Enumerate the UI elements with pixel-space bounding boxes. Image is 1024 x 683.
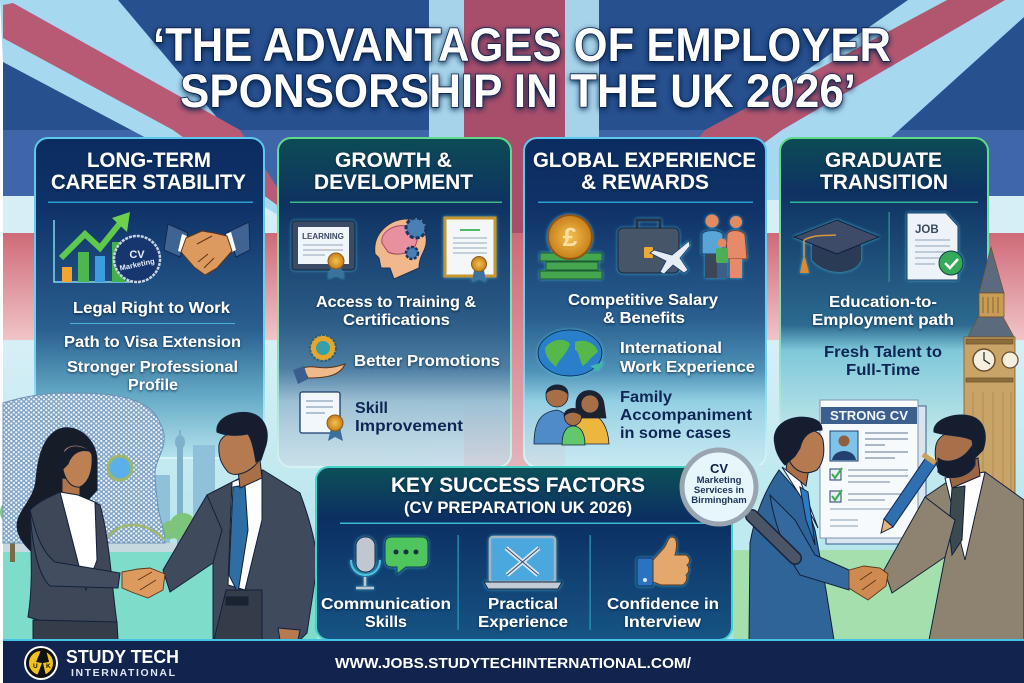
text: fresh talent to full-time [824, 344, 942, 379]
logo: study tech: K [46, 663, 51, 670]
panel heading: graduate transition: GRADUATE [825, 149, 942, 172]
panel heading: growth and development: DEVELOPMENT [314, 171, 473, 194]
text: fresh talent to full-time: Fresh Talent to [824, 344, 942, 361]
icon: growth chart with CV marketing stamp: Marketing [119, 256, 156, 273]
icon: speech bubble [385, 537, 428, 574]
text: access to training and certifications: Access to Training & [316, 294, 476, 311]
logo: study tech: U [33, 663, 38, 670]
panel heading: key success factors: (CV PREPARATION UK 2026) [404, 498, 632, 517]
icon: learning certificate [292, 221, 355, 279]
text: fresh talent to full-time: Full-Time [846, 362, 920, 379]
icon: magnifying glass: Birmingham [691, 495, 747, 506]
icon: globe [538, 330, 604, 376]
panel heading: growth and development: GROWTH & [335, 149, 452, 172]
text: stronger professional profile: Profile [128, 377, 178, 394]
icon: job document with check [907, 213, 963, 280]
illustration: birmingham skyline and plaza [0, 430, 317, 640]
panel: global experience and rewards [524, 138, 766, 467]
illustration: man in beige suit [884, 415, 1024, 640]
icon: growth chart with CV marketing stamp [54, 212, 160, 282]
icon: briefcase with plane [618, 220, 690, 274]
title: SPONSORSHIP IN THE UK 2026’ [180, 64, 856, 117]
text: family accompaniment in some cases: Family [620, 389, 672, 406]
title: ‘THE ADVANTAGES OF EMPLOYER [153, 18, 891, 71]
illustration: handshake left pair [122, 568, 165, 598]
text: communication skills: Skills [365, 614, 407, 631]
text: family accompaniment in some cases: Accompaniment [620, 407, 753, 424]
text: education-to-employment path: Education-to- [829, 294, 937, 311]
icon: head with brain and gears [375, 218, 426, 279]
icon: graduation cap [794, 220, 879, 273]
text: international work experience [620, 340, 755, 376]
icon: job document with check: JOB [915, 224, 939, 236]
illustration: man in grey suit [163, 412, 317, 640]
text: family accompaniment in some cases [620, 389, 753, 442]
text: confidence in interview: Interview [624, 614, 702, 631]
text: skill improvement: Improvement [355, 418, 464, 435]
logo text: study tech international [66, 646, 179, 679]
illustration: big ben [964, 247, 1018, 512]
text: communication skills: Communication [321, 596, 451, 613]
icon: learning certificate: LEARNING [302, 232, 344, 241]
panel heading: long-term career stability [51, 149, 246, 194]
text: education-to-employment path: Employment path [812, 312, 954, 329]
icon: skill document with rosette [300, 392, 343, 441]
panel heading: graduate transition [820, 149, 948, 194]
panel: graduate transition [780, 138, 988, 460]
panel heading: global experience and rewards: GLOBAL EXPERIENCE [533, 149, 756, 172]
panel heading: long-term career stability: CAREER STABILITY [51, 171, 246, 194]
text: better promotions: Better Promotions [354, 353, 500, 370]
icon: pound coin with cash: £ [563, 222, 578, 252]
text: competitive salary and benefits: Competitive Salary [568, 292, 718, 309]
text: practical experience: Practical [488, 596, 558, 613]
panel heading: growth and development [314, 149, 473, 194]
text: practical experience [478, 596, 568, 631]
icon: magnifying glass: CV [710, 461, 728, 476]
text: path to visa extension: Path to Visa Extension [64, 334, 241, 351]
text: confidence in interview: Confidence in [607, 596, 719, 613]
illustration: handshake right pair [849, 566, 888, 600]
footer url: WWW.JOBS.STUDYTECHINTERNATIONAL.COM/ [335, 655, 692, 672]
text: legal right to work: Legal Right to Work [73, 300, 230, 317]
text: stronger professional profile: Stronger Professional [67, 359, 238, 376]
text: confidence in interview [607, 596, 719, 631]
text: skill improvement: Skill [355, 400, 388, 417]
footer bar [3, 639, 1024, 683]
panel heading: graduate transition: TRANSITION [820, 171, 948, 194]
icon: microphone [351, 537, 380, 588]
text: skill improvement [355, 400, 464, 435]
icon: magnifying glass [682, 450, 795, 558]
text: family accompaniment in some cases: in some cases [620, 425, 731, 442]
panel heading: long-term career stability: LONG-TERM [87, 149, 211, 172]
icon: laptop with tools [484, 537, 562, 589]
illustration: strong cv document: STRONG CV [830, 408, 908, 423]
panel heading: key success factors: KEY SUCCESS FACTORS [391, 474, 645, 497]
panel heading: key success factors [391, 474, 645, 517]
text: access to training and certifications: Certifications [343, 312, 450, 329]
text: international work experience: Work Experience [620, 359, 755, 376]
panel: long-term career stability [35, 138, 264, 458]
text: education-to-employment path [812, 294, 954, 329]
icon: family [702, 214, 747, 278]
text: access to training and certifications [316, 294, 476, 329]
text: competitive salary and benefits [568, 292, 718, 327]
panel: key success factors [316, 467, 732, 640]
logo text: study tech international: INTERNATIONAL [71, 667, 176, 679]
panel heading: global experience and rewards: & REWARDS [581, 171, 709, 194]
illustration: woman in suit [17, 428, 120, 640]
illustration: right ground [733, 465, 1024, 640]
logo text: study tech international: STUDY TECH [66, 646, 179, 667]
icon: growth chart with CV marketing stamp: CV [129, 249, 145, 261]
icon: handshake [164, 222, 250, 275]
panel heading: global experience and rewards [533, 149, 756, 194]
icon: magnifying glass: Services in [694, 485, 744, 496]
illustration: selfridges building [3, 393, 165, 543]
illustration: man in blue suit [749, 417, 849, 640]
text: practical experience: Experience [478, 614, 568, 631]
text: international work experience: International [620, 340, 722, 357]
illustration: family portrait [534, 385, 609, 445]
text: competitive salary and benefits: & Benefits [603, 310, 685, 327]
icon: magnifying glass: Marketing [697, 475, 742, 486]
logo: study tech [24, 646, 58, 680]
icon: thumbs up [637, 537, 690, 586]
panel: growth and development [278, 138, 511, 467]
icon: hand with medal [293, 335, 345, 384]
illustration: strong cv document [820, 400, 926, 544]
text: stronger professional profile [67, 359, 238, 394]
text: communication skills [321, 596, 451, 631]
icon: gold framed certificate [445, 218, 495, 282]
title [153, 18, 891, 117]
icon: pound coin with cash [540, 215, 602, 279]
icon: pen [881, 452, 937, 533]
